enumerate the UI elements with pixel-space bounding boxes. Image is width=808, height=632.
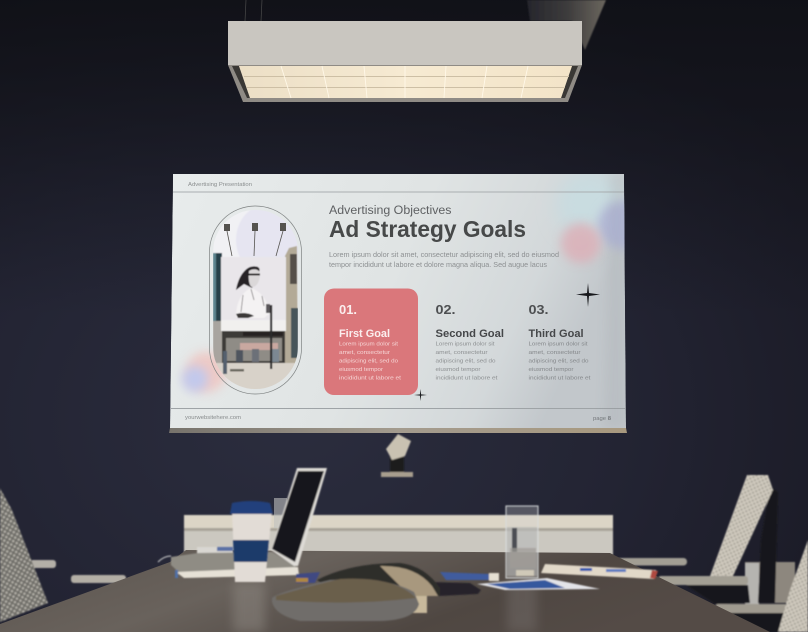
goal 3: amet, consectetur (528, 350, 581, 356)
goal card 1 (324, 288, 418, 395)
water glass (506, 506, 538, 578)
goal card 1: First Goal (339, 328, 390, 340)
right chairs (617, 475, 808, 632)
goal 3: incididunt ut labore et (528, 376, 591, 382)
footer website: yourwebsitehere.com (185, 415, 241, 421)
billboard lamps (224, 223, 286, 256)
presentation screen (170, 171, 646, 428)
goal card 1: eiusmod tempor (339, 367, 383, 373)
laptop and papers (158, 468, 327, 583)
goal 3 (528, 302, 591, 382)
TV frame (169, 428, 627, 433)
ceiling duct (527, 0, 606, 50)
intro paragraph (329, 252, 558, 268)
capsule outline (210, 206, 302, 394)
glass behind laptop (274, 498, 287, 528)
goal card 1: incididunt ut labore et (339, 376, 401, 382)
goal card 1: 01. (339, 302, 357, 317)
goal 3: Lorem ipsum dolor sit (528, 342, 588, 348)
goal card 1: amet, consectetur (339, 350, 390, 356)
goal 2: 02. (436, 302, 456, 317)
notebook and pen (541, 564, 658, 579)
header text: Advertising Presentation (188, 182, 252, 188)
goal 2: Lorem ipsum dolor sit (436, 342, 495, 348)
intro paragraph: tempor incididunt ut labore et dolore magna aliqua. Sed augue lacus (329, 260, 547, 269)
billboard street photo (213, 204, 300, 393)
screen edge shading (612, 180, 620, 420)
left chair (0, 488, 126, 622)
goal 3: 03. (528, 302, 548, 317)
goal 3: eiusmod tempor (528, 367, 574, 373)
goal 2 (436, 302, 504, 382)
goal 3: adipiscing elit, sed do (528, 358, 589, 364)
conference table (0, 550, 770, 632)
goal 3: Third Goal (528, 328, 584, 340)
blue brochures (440, 572, 600, 590)
goal 2: eiusmod tempor (436, 367, 481, 373)
icon: small sparkle (414, 389, 427, 401)
subtitle: Advertising Objectives (329, 205, 452, 217)
billboard woman image (221, 257, 286, 320)
goal 2: adipiscing elit, sed do (436, 358, 496, 364)
icon: large sparkle (576, 283, 600, 307)
goal card 1: adipiscing elit, sed do (339, 358, 399, 364)
coffee cup (230, 501, 273, 582)
ceiling light fixture (228, 0, 582, 102)
blurred colour blobs bottom left (182, 352, 226, 392)
footer page number: page 8 (593, 416, 612, 422)
conference phone (272, 563, 481, 621)
goal 2: Second Goal (436, 328, 504, 340)
goal card 1: Lorem ipsum dolor sit (339, 342, 398, 348)
title: Ad Strategy Goals (329, 216, 526, 242)
footer line (171, 408, 626, 409)
goal 2: amet, consectetur (436, 350, 488, 356)
wall projector mount (381, 434, 413, 477)
intro paragraph: Lorem ipsum dolor sit amet, consectetur adipiscing elit, sed do eiusmod (329, 250, 559, 259)
credenza (184, 515, 613, 555)
blurred colour blobs top right (558, 180, 625, 265)
goal 2: incididunt ut labore et (436, 376, 498, 382)
